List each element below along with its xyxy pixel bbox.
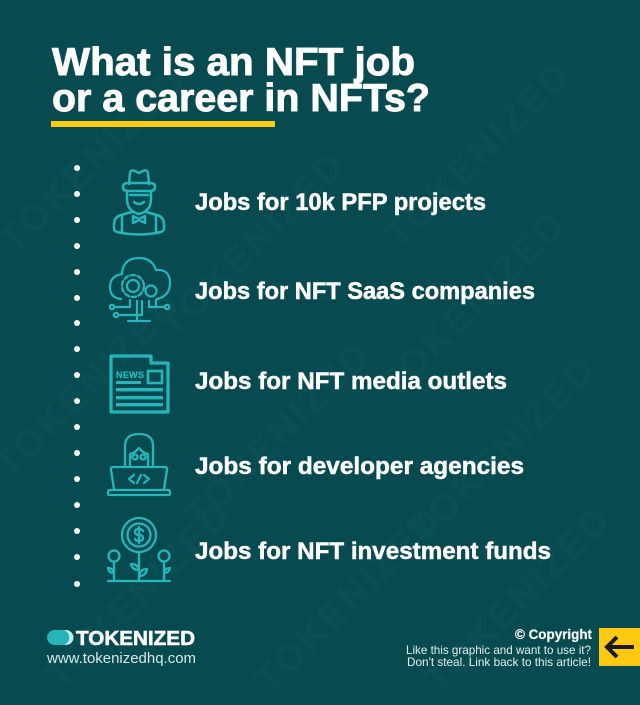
icon: newspaper (111, 356, 168, 412)
background watermark pattern: TOKENIZED (177, 333, 380, 536)
list item labels: Jobs for 10k PFP projects (195, 189, 486, 216)
background watermark pattern: TOKENIZED (402, 348, 605, 551)
title (52, 41, 430, 120)
icon: money flowers (108, 518, 170, 581)
title underline (51, 121, 275, 127)
copyright note: Like this graphic and want to use it? (406, 643, 591, 657)
background watermark pattern: TOKENIZED (372, 203, 575, 406)
title: What is an NFT job (52, 41, 415, 84)
list item labels: Jobs for developer agencies (195, 453, 524, 480)
title: or a career in NFTs? (52, 77, 430, 120)
copyright note: Don't steal. Link back to this article! (407, 655, 591, 669)
background watermark pattern: TOKENIZED (417, 498, 620, 701)
icon: newspaper: NEWS (116, 370, 144, 380)
brand logo: TOKENIZED (76, 627, 195, 650)
list item labels: Jobs for NFT SaaS companies (195, 278, 535, 305)
copyright note: © Copyright (515, 627, 592, 642)
website url: www.tokenizedhq.com (46, 651, 196, 667)
list item labels: Jobs for NFT media outlets (195, 368, 507, 395)
background watermark pattern: TOKENIZED (37, 493, 240, 696)
icon: person with hat and bow tie (114, 170, 164, 234)
dotted timeline (74, 165, 80, 587)
icon: developer at laptop (108, 434, 170, 495)
copyright note (406, 627, 592, 669)
background watermark pattern: TOKENIZED (247, 498, 450, 701)
arrow box (599, 628, 640, 666)
list item labels (195, 189, 551, 565)
icon: cloud with gears and circuit (110, 258, 170, 321)
list item labels: Jobs for NFT investment funds (195, 538, 551, 565)
background watermark pattern: TOKENIZED (152, 143, 355, 346)
background watermark pattern: TOKENIZED (377, 53, 580, 256)
